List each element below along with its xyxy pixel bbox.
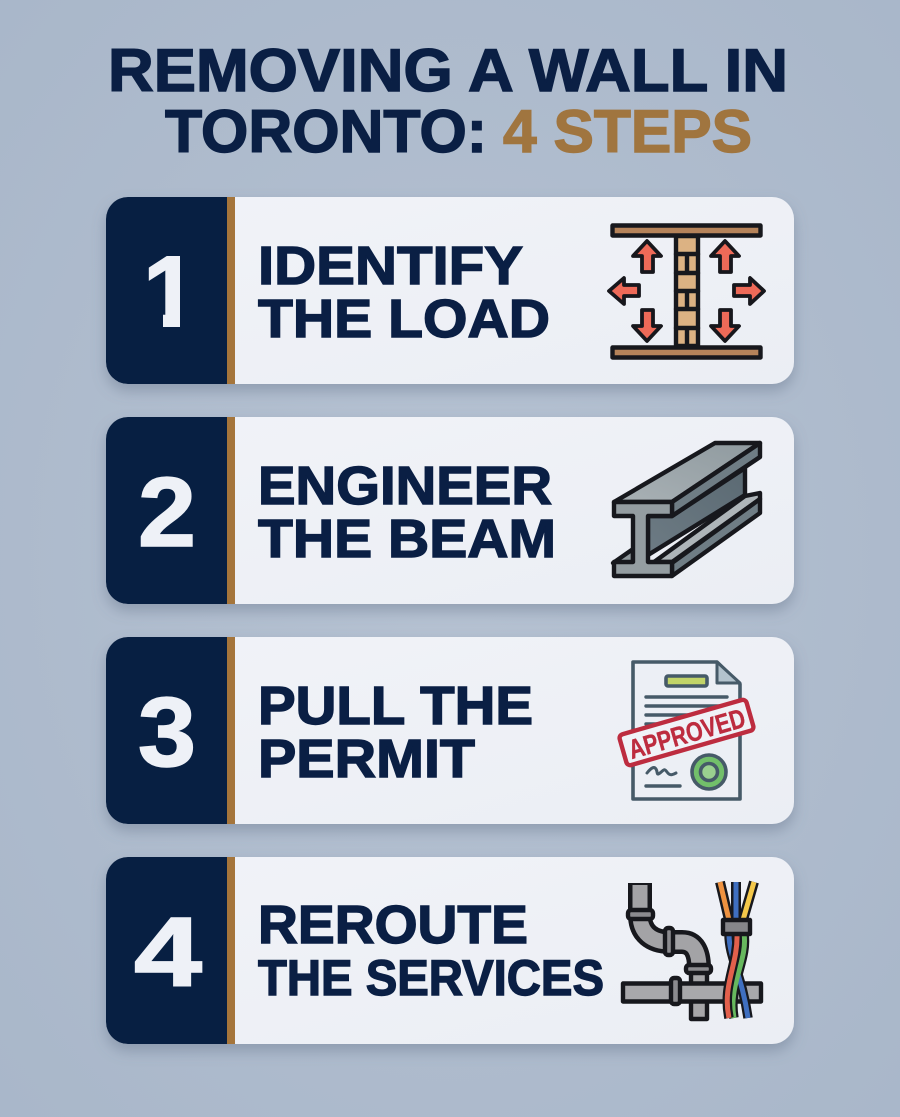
icon: approved permit document: APPROVED <box>625 703 749 765</box>
step 4 heading: REROUTE <box>258 895 528 955</box>
icon: pipes and wires <box>623 882 761 1019</box>
icon: approved permit document <box>619 662 754 799</box>
step 4 heading: THE SERVICES <box>258 950 604 1006</box>
step number 2: 2 <box>138 457 196 567</box>
step 3 heading <box>258 676 533 789</box>
step 2 heading: ENGINEER <box>258 456 552 516</box>
title: REMOVING A WALL IN <box>108 37 788 104</box>
title: TORONTO: <box>165 98 487 165</box>
step 1 heading: IDENTIFY <box>258 236 523 296</box>
panel: step 4 reroute the services <box>106 857 794 1044</box>
step 2 heading <box>258 456 556 569</box>
icon: steel I-beam <box>613 443 760 576</box>
panel: step 1 identify the load <box>106 197 794 384</box>
step number 1: 1 <box>143 236 199 348</box>
step number 4: 4 <box>134 897 202 1007</box>
step 1 heading: THE LOAD <box>258 289 550 349</box>
step 4 heading <box>258 895 604 1006</box>
step 3 heading: PERMIT <box>258 729 475 789</box>
title <box>108 37 788 165</box>
step number 3: 3 <box>138 677 196 787</box>
panel: step 2 engineer the beam <box>106 417 794 604</box>
step 2 heading: THE BEAM <box>258 509 556 569</box>
panel: step 3 pull the permit <box>106 637 794 824</box>
title: 4 STEPS <box>503 98 752 165</box>
step 3 heading: PULL THE <box>258 676 533 736</box>
step 1 heading <box>258 236 550 349</box>
icon: load-bearing wall with arrows <box>609 226 764 358</box>
